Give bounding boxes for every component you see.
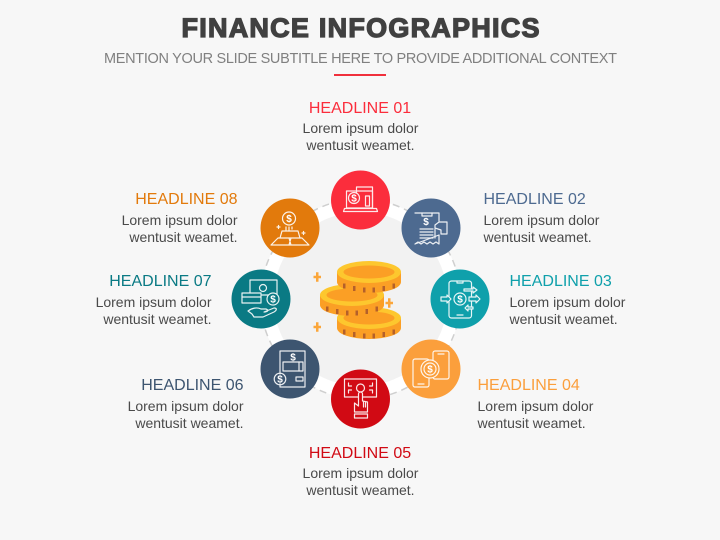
panel: headline 04 [476,377,594,431]
icon: gold bars and coin: $ [286,214,292,225]
text block: wentusit weamet. [476,415,586,431]
heading: HEADLINE 03 [510,273,612,290]
heading: HEADLINE 06 [141,377,244,394]
panel: headline 05 [303,445,419,498]
heading: HEADLINE 08 [135,191,238,208]
panel: headline 07 [96,273,212,327]
panel: central ring [260,199,460,399]
icon: wallet card: $ [277,374,283,386]
panel: headline 02 [482,191,600,245]
text block: wentusit weamet. [134,415,244,431]
text block: wentusit weamet. [305,482,415,498]
text block: Lorem ipsum dolor [510,294,626,310]
icon: coin stack [314,261,401,339]
icon: wallet card: $ [290,352,296,364]
text block: wentusit weamet. [482,229,592,245]
icon: banknote with finger [331,370,390,428]
text block: wentusit weamet. [128,229,238,245]
panel: headline 03 [508,273,626,327]
icon: laptop with coin: $ [351,194,357,204]
subtitle: MENTION YOUR SLIDE SUBTITLE HERE TO PROVIDE ADDITIONAL CONTEXT [104,51,617,67]
icon: two phones exchange: $ [427,364,433,376]
text block: Lorem ipsum dolor [122,212,238,228]
icon: wallet card [260,340,320,398]
text block: Lorem ipsum dolor [96,294,212,310]
heading: HEADLINE 05 [309,445,411,462]
panel: headline 01 [303,100,419,153]
icon: receipt with hand: $ [423,217,429,228]
heading: HEADLINE 02 [484,191,586,208]
text block: Lorem ipsum dolor [128,398,244,414]
text block: Lorem ipsum dolor [478,398,594,414]
panel: headline 06 [128,377,244,431]
icon: phone with arrows: $ [457,294,463,306]
text block: Lorem ipsum dolor [303,120,419,136]
text block: Lorem ipsum dolor [303,465,419,481]
text block: Lorem ipsum dolor [484,212,600,228]
icon: hand with money and card [232,270,290,328]
icon: receipt with hand [402,198,460,258]
panel: headline 08 [122,191,238,245]
heading: HEADLINE 04 [478,377,580,394]
text block: wentusit weamet. [305,137,415,153]
icon: two phones exchange [402,340,460,398]
icon: laptop with coin [331,170,390,230]
heading: HEADLINE 01 [309,100,411,117]
title: FINANCE INFOGRAPHICS [182,13,540,43]
icon: hand with money and card: $ [270,294,276,306]
icon: gold bars and coin [260,198,320,258]
text block: wentusit weamet. [508,311,618,327]
icon: phone with arrows [430,270,490,328]
title divider [334,74,386,76]
heading: HEADLINE 07 [109,273,212,290]
text block: wentusit weamet. [102,311,212,327]
